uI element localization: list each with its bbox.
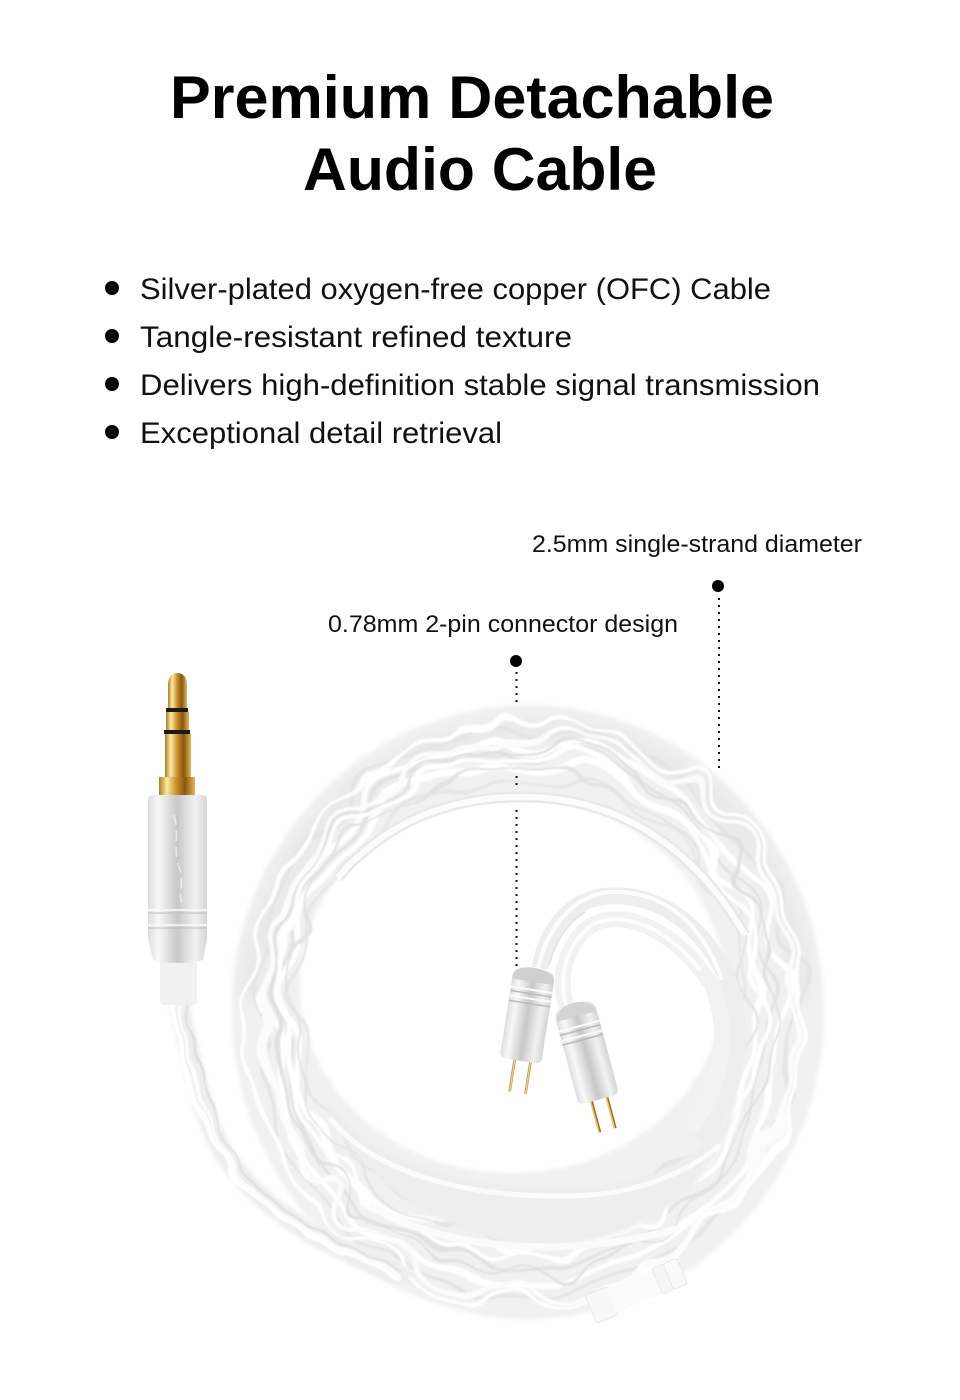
icon: 2-pin connector left — [495, 965, 556, 1096]
callout: 2-pin connector: 0.78mm 2-pin connector design — [328, 611, 678, 638]
callout: single-strand diameter — [532, 531, 862, 768]
flat lower band of the coil — [318, 1085, 735, 1247]
title: Audio Cable — [303, 136, 657, 203]
feature bullet list: Silver-plated oxygen-free copper (OFC) Cable — [140, 273, 771, 306]
feature bullet list — [105, 273, 820, 450]
feature bullet list: Delivers high-definition stable signal transmission — [140, 369, 820, 402]
feature bullet list: Exceptional detail retrieval — [140, 417, 502, 450]
cable tail from plug — [172, 1000, 400, 1280]
icon: 2-pin connector right — [553, 998, 627, 1136]
icon: y-splitter — [585, 1257, 688, 1323]
callout: 2-pin connector — [328, 611, 678, 966]
feature bullet list: Tangle-resistant refined texture — [140, 321, 572, 354]
title — [170, 64, 774, 203]
callout: single-strand diameter: 2.5mm single-strand diameter — [532, 531, 862, 558]
cable coil — [232, 705, 824, 1319]
title: Premium Detachable — [170, 64, 774, 131]
ear-hook branches to connectors — [538, 892, 737, 1140]
icon: 3.5mm gold jack plug — [148, 673, 207, 1005]
inner thin cable — [338, 797, 745, 935]
